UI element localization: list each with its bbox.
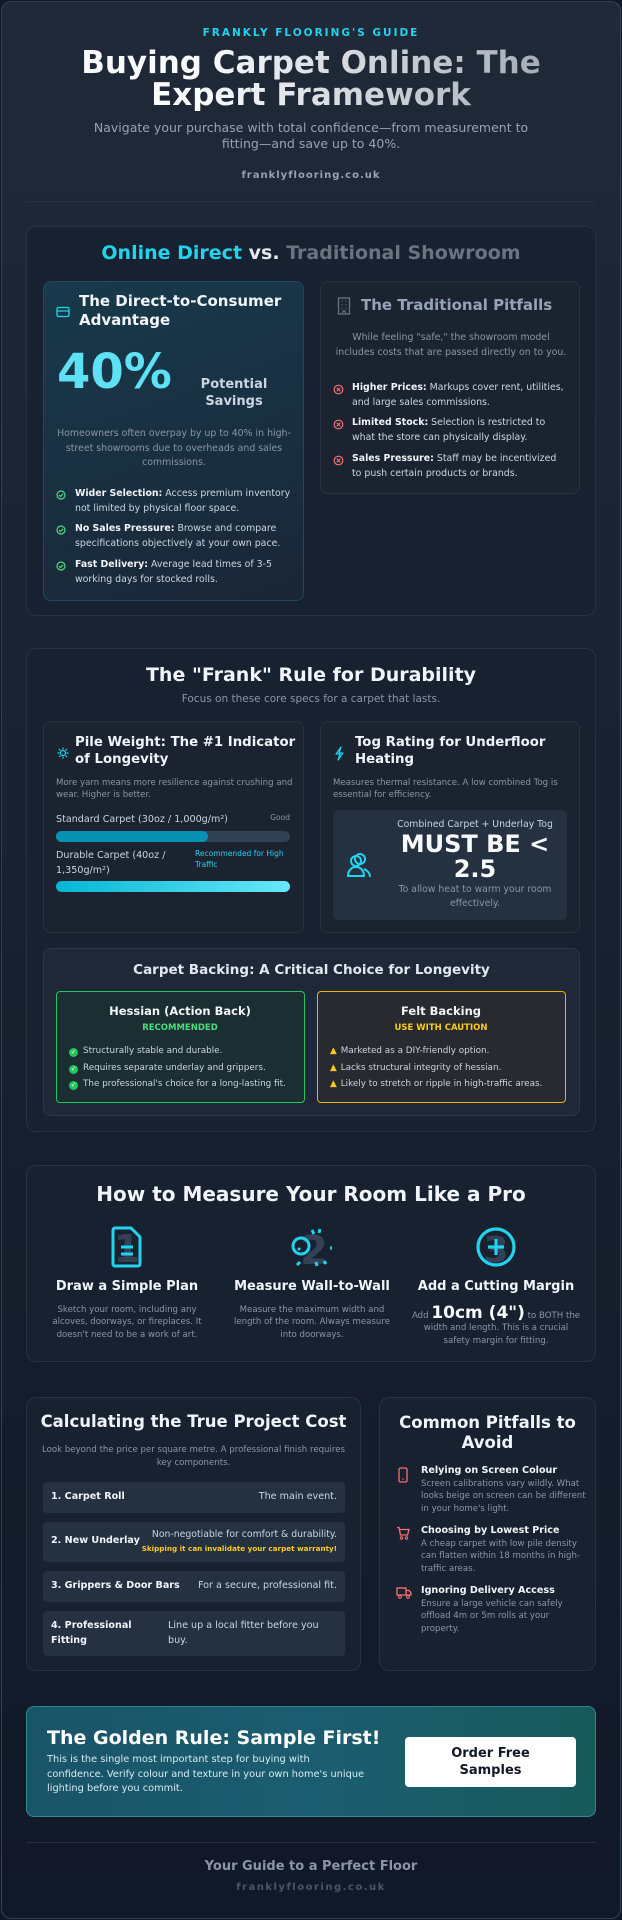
bar: durable: Durable Carpet (40oz / 1,350g/m²) — [56, 850, 165, 876]
bullet: fast delivery: working days for stocked rolls. — [75, 574, 218, 585]
heading: The Golden Rule: Sample First! — [47, 1727, 380, 1749]
section title: Online Direct vs. Traditional Showroom — [101, 242, 521, 264]
heading: Advantage — [79, 311, 170, 329]
icon: person — [347, 853, 371, 877]
bar: standard — [56, 813, 290, 842]
panel: measure — [26, 1165, 596, 1362]
step 2: Measure the maximum width and — [240, 1305, 384, 1315]
paragraph: Homeowners often overpay by up to 40% in high-street showrooms due to overheads and sales commissions. — [57, 428, 291, 468]
paragraph: Measures thermal resistance. A low combined Tog is essential for efficiency. — [333, 778, 558, 800]
box: hessian: RECOMMENDED — [142, 1023, 218, 1033]
heading: The Direct-to-Consumer — [79, 292, 281, 310]
subtitle — [94, 120, 528, 151]
step 3 — [412, 1227, 580, 1346]
panel: durability — [26, 648, 596, 1132]
icon: bolt — [335, 746, 344, 761]
paragraph: key components. — [157, 1458, 230, 1468]
bar: durable — [56, 849, 290, 892]
step 2: length of the room. Always measure — [234, 1317, 390, 1327]
callout: golden rule — [26, 1706, 596, 1817]
section title: The "Frank" Rule for Durability — [146, 664, 476, 686]
title — [40, 47, 582, 111]
box: hessian: ✓ — [71, 1064, 76, 1072]
step 3: safety margin for fitting. — [443, 1336, 548, 1346]
step 1: Sketch your room, including any — [57, 1305, 197, 1315]
title: Buying Carpet Online: The — [81, 45, 541, 81]
pitfall: lowest price: Choosing by Lowest Price — [421, 1525, 560, 1536]
section title: How to Measure Your Room Like a Pro — [96, 1182, 526, 1206]
box: hessian: Requires separate underlay and grippers. — [83, 1062, 266, 1072]
panel: project cost — [26, 1397, 361, 1671]
stat 40%: 40% — [57, 344, 172, 400]
heading: Heating — [355, 752, 414, 767]
step 2: Measure Wall-to-Wall — [234, 1279, 390, 1294]
row 1: The main event. — [259, 1491, 337, 1502]
button: Order Free — [451, 1746, 530, 1761]
pitfall: screen colour: Relying on Screen Colour — [421, 1465, 557, 1476]
row 4: Line up a local fitter before you — [168, 1620, 319, 1631]
row 4: 4. Professional — [51, 1620, 132, 1631]
row 2: Non-negotiable for comfort & durability. — [152, 1529, 337, 1540]
heading: Pile Weight: The #1 Indicator — [75, 735, 295, 750]
tog label: Combined Carpet + Underlay Tog — [397, 819, 553, 830]
bar: durable: Recommended for High Traffic — [195, 849, 284, 869]
row 1: 1. Carpet Roll — [51, 1491, 125, 1502]
bullet: sales pressure — [334, 453, 556, 479]
panel: carpet backing — [43, 948, 580, 1116]
box: felt: ▲ Likely to stretch or ripple in high-traffic areas. — [330, 1079, 542, 1089]
step 2: into doorways. — [280, 1330, 344, 1340]
text: This is the single most important step for buying with — [47, 1754, 310, 1765]
bullet: limited stock: Limited Stock: Selection is restricted to — [352, 417, 545, 428]
card: tog rating — [320, 721, 580, 933]
heading: of Longevity — [75, 752, 168, 767]
card: traditional pitfalls — [320, 281, 580, 494]
icon: tape measure — [292, 1228, 332, 1268]
title: Expert Framework — [151, 77, 471, 113]
paragraph — [336, 332, 566, 358]
icon: card — [56, 306, 70, 318]
row 2: 2. New Underlay — [51, 1535, 140, 1546]
footer: Your Guide to a Perfect Floor — [205, 1859, 417, 1874]
row 2: Skipping it can invalidate your carpet warranty! — [142, 1544, 337, 1553]
button: Samples — [460, 1763, 522, 1778]
box: felt — [317, 991, 566, 1103]
icon: gear — [58, 748, 68, 758]
box: felt: ▲ Lacks structural integrity of hessian. — [330, 1062, 501, 1072]
box: felt: ▲ Marketed as a DIY-friendly option. — [330, 1046, 489, 1056]
box: felt: USE WITH CAUTION — [395, 1023, 487, 1033]
box: hessian: ✓ — [71, 1081, 76, 1089]
pitfall: delivery access — [396, 1585, 563, 1634]
bullets — [334, 382, 564, 479]
pitfall: screen colour: Screen calibrations vary wildly. What looks beige on screen can be different in your home's light. — [421, 1479, 586, 1514]
heading — [79, 292, 282, 329]
card: pile weight — [43, 721, 304, 933]
stat label: Potential Savings — [201, 377, 267, 409]
box: hessian: Hessian (Action Back) — [109, 1004, 251, 1018]
paragraph — [42, 1445, 345, 1468]
bullets — [56, 488, 290, 585]
button — [405, 1737, 576, 1787]
paragraph: While feeling "safe," the showroom model — [352, 332, 550, 343]
pitfall: delivery access: Ignoring Delivery Access — [421, 1585, 555, 1596]
heading: The Traditional Pitfalls — [361, 296, 552, 314]
row 1 — [43, 1482, 345, 1513]
bullet: wider selection: Wider Selection: Access premium inventory not limited by physical floor space. — [75, 488, 290, 514]
paragraph: Look beyond the price per square metre. A professional finish requires — [42, 1445, 345, 1455]
panel: online vs showroom — [26, 226, 596, 616]
heading: Tog Rating for Underfloor — [355, 735, 545, 750]
box: felt: Felt Backing — [401, 1004, 481, 1018]
paragraph: includes costs that are passed directly on to you. — [336, 347, 566, 358]
header — [81, 27, 541, 181]
row 4: Fitting — [51, 1635, 87, 1646]
bullet: higher prices: and large sales commissions. — [352, 397, 490, 408]
text: lighting before you commit. — [47, 1783, 183, 1794]
step 1 — [52, 1226, 202, 1340]
paragraph: More yarn means more resilience against crushing and wear. Higher is better. — [56, 778, 292, 800]
bar: standard: Standard Carpet (30oz / 1,000g/m²) — [56, 814, 228, 825]
box: hessian: Structurally stable and durable. — [83, 1046, 222, 1056]
bullet: higher prices — [334, 382, 564, 408]
pitfall: delivery access: Ensure a large vehicle can safely offload 4m or 5m rolls at your property. — [421, 1599, 563, 1634]
row 3 — [43, 1571, 345, 1602]
kicker: FRANKLY FLOORING'S GUIDE — [203, 27, 419, 39]
box: hessian: The professional's choice for a long-lasting fit. — [83, 1079, 286, 1089]
heading — [355, 735, 546, 767]
text: confidence. Verify colour and texture in your own home's unique — [47, 1768, 364, 1780]
row 3: For a secure, professional fit. — [198, 1580, 337, 1591]
bullet: limited stock — [334, 417, 545, 443]
heading: Carpet Backing: A Critical Choice for Longevity — [133, 962, 490, 978]
row 4 — [43, 1611, 345, 1656]
bar: standard: Good — [270, 813, 290, 822]
subtitle: Focus on these core specs for a carpet that lasts. — [182, 693, 440, 705]
heading: Common Pitfalls to Avoid — [399, 1413, 576, 1452]
tog note: To allow heat to warm your room effectively. — [399, 884, 551, 909]
footer: franklyflooring.co.uk — [236, 1882, 386, 1893]
step 3: width and length. This is a crucial — [424, 1323, 568, 1333]
tog callout box — [333, 810, 567, 920]
pitfall: lowest price: A cheap carpet with low pile density can flatten within 18 months in high-traffic areas. — [421, 1539, 580, 1574]
step 3: Add 10cm (4") to BOTH the — [412, 1303, 580, 1323]
step 2 — [234, 1228, 390, 1340]
tog value — [401, 830, 549, 883]
step 1: doesn't need to be a work of art. — [57, 1330, 197, 1340]
step 1: Draw a Simple Plan — [56, 1279, 198, 1294]
card: direct advantage — [43, 281, 304, 601]
bullet: no sales pressure: No Sales Pressure: Browse and compare specifications objectively at your own pace. — [75, 523, 280, 549]
subtitle: fitting—and save up to 40%. — [222, 136, 400, 151]
row 4: buy. — [168, 1635, 188, 1646]
box: hessian: ✓ — [71, 1048, 76, 1056]
bullet: fast delivery: Fast Delivery: Average lead times of 3-5 — [75, 559, 272, 570]
icon: building — [338, 297, 350, 315]
bullet: limited stock: what the store can physically display. — [352, 432, 527, 443]
box: hessian — [56, 991, 305, 1103]
row 3: 3. Grippers & Door Bars — [51, 1580, 180, 1591]
subtitle: Navigate your purchase with total confidence—from measurement to — [94, 120, 528, 135]
text — [46, 1754, 364, 1794]
step 3: Add a Cutting Margin — [418, 1279, 574, 1294]
bullet: sales pressure: Sales Pressure: Staff may be incentivized — [352, 453, 556, 464]
bullet: higher prices: Higher Prices: Markups cover rent, utilities, — [352, 382, 564, 393]
heading — [75, 735, 296, 767]
panel: common pitfalls — [379, 1397, 596, 1671]
pitfall: lowest price — [397, 1525, 580, 1574]
url: franklyflooring.co.uk — [241, 170, 381, 181]
tog value: MUST BE < — [401, 830, 549, 858]
footer — [204, 1859, 418, 1893]
tog value: 2.5 — [454, 855, 496, 883]
pitfall: screen colour — [398, 1465, 586, 1514]
step 1: alcoves, doorways, or fireplaces. It — [52, 1317, 202, 1327]
heading: Calculating the True Project Cost — [41, 1412, 346, 1431]
row 2 — [43, 1522, 345, 1562]
bullet: fast delivery — [56, 559, 272, 585]
icon: plus circle — [476, 1227, 516, 1268]
bullet: sales pressure: to push certain products or brands. — [352, 468, 518, 479]
